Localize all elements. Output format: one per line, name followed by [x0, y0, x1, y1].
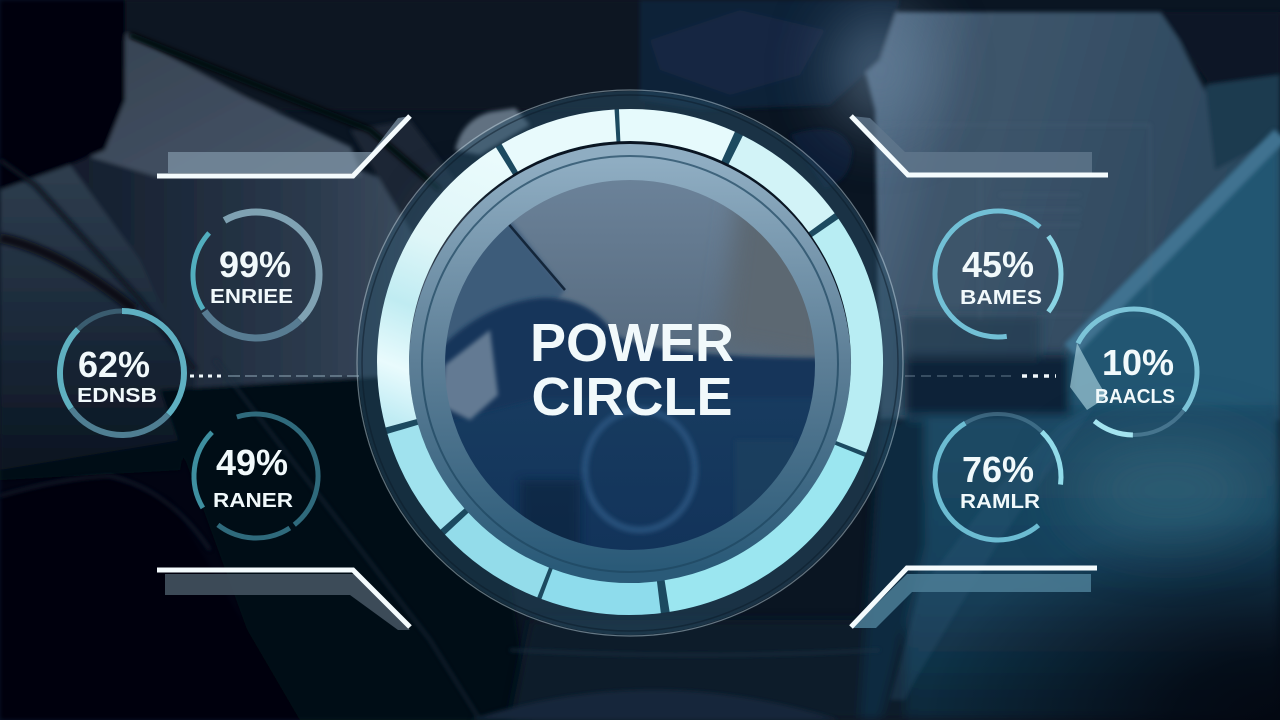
- gauge: 45%: BAMES: [960, 287, 1042, 309]
- inner translucent ring: [422, 156, 838, 572]
- gauge: 62%: [34, 285, 210, 461]
- gauge: 45%: [910, 186, 1086, 362]
- gauge: 10%: BAACLS: [1095, 386, 1175, 408]
- bracket: bottom right: [851, 568, 1097, 628]
- title: CIRCLE: [532, 367, 732, 427]
- gauge: 45%: 45%: [962, 244, 1034, 285]
- outer translucent halo: [357, 90, 903, 636]
- central disc with windshield and steering wheel: [445, 180, 815, 550]
- gauge: 10%: [1046, 284, 1222, 460]
- gauge: 10%: 10%: [1102, 342, 1174, 383]
- gauge: 62%: 62%: [78, 344, 150, 385]
- connector: right dashed line: [905, 375, 1056, 377]
- connector: left dashed line: [190, 374, 360, 378]
- bracket: top left: [157, 116, 410, 176]
- gauge: 76%: 76%: [962, 449, 1034, 490]
- gauge: 62%: EDNSB: [77, 385, 157, 407]
- bracket: bottom left: [157, 570, 410, 630]
- gauge: 49%: RANER: [213, 490, 294, 512]
- title: POWER: [530, 313, 734, 373]
- gauge: 76%: [909, 388, 1087, 566]
- gauge: 99%: [167, 186, 345, 364]
- gauge: 76%: RAMLR: [960, 491, 1041, 513]
- gauge: 49%: [170, 390, 342, 562]
- gauge: 99%: ENRIEE: [210, 286, 293, 308]
- title: [530, 313, 734, 427]
- gauge: 99%: 99%: [219, 244, 291, 285]
- bracket: top right: [851, 116, 1108, 175]
- power ring segments: [295, 27, 965, 697]
- gauge: 49%: 49%: [216, 442, 288, 483]
